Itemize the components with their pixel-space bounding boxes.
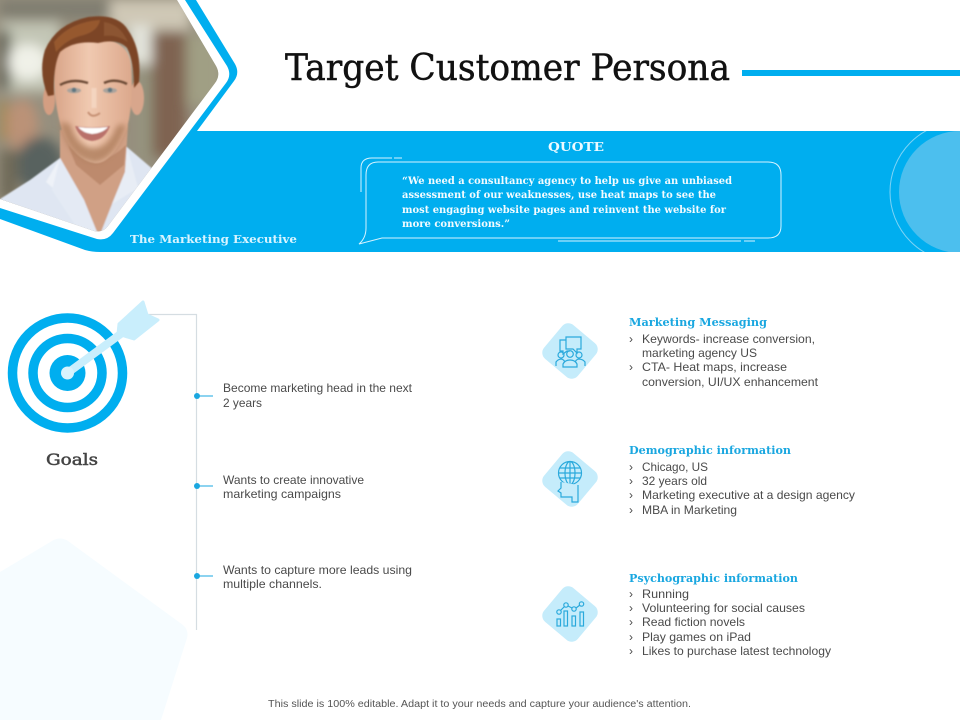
- section: demographic information: Marketing executive at a design agency: [642, 488, 855, 502]
- goal 3: multiple channels.: [223, 577, 322, 591]
- eyes: [67, 88, 81, 93]
- face: [54, 38, 132, 163]
- shirt: [0, 147, 155, 240]
- section: psychographic information: Running: [642, 587, 689, 601]
- section: psychographic information: ›: [629, 601, 633, 615]
- quote text: most engaging website pages and reinvent the website for: [402, 204, 726, 216]
- quote text: assessment of our weaknesses, use heat maps to see the: [402, 189, 716, 201]
- section: psychographic information: ›: [629, 587, 633, 601]
- section: demographic information: Demographic information: [629, 443, 792, 457]
- ears: [43, 85, 55, 115]
- quote text: [402, 175, 733, 230]
- icon: target with arrow: [12, 302, 158, 428]
- quote heading: QUOTE: [548, 140, 604, 154]
- section: psychographic information: Volunteering for social causes: [642, 601, 805, 615]
- stubble: [60, 122, 126, 163]
- blue band: [0, 0, 960, 252]
- title rule: [742, 70, 960, 76]
- section: psychographic information: Play games on iPad: [642, 630, 751, 644]
- header band: [0, 0, 960, 262]
- section: marketing messaging: [629, 315, 819, 389]
- section: marketing messaging: CTA- Heat maps, increase: [642, 360, 787, 374]
- footer note: This slide is 100% editable. Adapt it to your needs and capture your audience's attention.: [268, 699, 691, 710]
- quote bubble: [359, 158, 781, 244]
- decorative circle: [890, 131, 960, 252]
- goals label: Goals: [46, 450, 98, 469]
- goal 2: [194, 473, 364, 501]
- section: demographic information: MBA in Marketing: [642, 503, 737, 517]
- section: demographic information: ›: [629, 503, 633, 517]
- section: psychographic information: ›: [629, 615, 633, 629]
- section: demographic information: [629, 443, 855, 517]
- goal 3: Wants to capture more leads using: [223, 563, 412, 577]
- icon: demographic information: [539, 448, 601, 510]
- white frame around photo: [0, 0, 229, 239]
- hair: [42, 16, 140, 96]
- quote text: “We need a consultancy agency to help us give an unbiased: [402, 175, 733, 187]
- section: marketing messaging: ›: [629, 332, 633, 346]
- section: demographic information: ›: [629, 488, 633, 502]
- goal 2: Wants to create innovative: [223, 473, 364, 487]
- brows: [60, 81, 88, 85]
- section: demographic information: 32 years old: [642, 474, 707, 488]
- icon: marketing messaging: [539, 320, 601, 382]
- section: psychographic information: Psychographic information: [629, 571, 799, 585]
- bubble outline: [359, 162, 781, 244]
- section: demographic information: ›: [629, 460, 633, 474]
- section: psychographic information: ›: [629, 644, 633, 658]
- section: psychographic information: [629, 571, 831, 658]
- section: demographic information: Chicago, US: [642, 460, 708, 474]
- mouth: [75, 126, 110, 141]
- section: marketing messaging: Marketing Messaging: [629, 315, 767, 329]
- section: psychographic information: Read fiction novels: [642, 615, 745, 629]
- title: Target Customer Persona: [285, 48, 730, 89]
- nose: [88, 112, 100, 116]
- photo of marketing executive: [0, 0, 230, 240]
- section: psychographic information: Likes to purchase latest technology: [642, 644, 831, 658]
- icon: psychographic information: [539, 583, 601, 645]
- goal 1: Become marketing head in the next: [223, 381, 413, 395]
- goal 1: [194, 381, 413, 410]
- section: marketing messaging: marketing agency US: [642, 346, 757, 360]
- section: psychographic information: ›: [629, 630, 633, 644]
- goal 3: [194, 563, 412, 591]
- quote text: more conversions.”: [402, 218, 510, 230]
- section: marketing messaging: Keywords- increase conversion,: [642, 332, 815, 346]
- neck: [60, 125, 128, 232]
- section: marketing messaging: ›: [629, 360, 633, 374]
- collar: [46, 162, 59, 186]
- background pale hexagon: [0, 538, 188, 720]
- goals connector line: [148, 314, 196, 630]
- goal 1: 2 years: [223, 396, 262, 410]
- persona name: The Marketing Executive: [130, 232, 297, 246]
- section: marketing messaging: conversion, UI/UX enhancement: [642, 375, 819, 389]
- section: demographic information: ›: [629, 474, 633, 488]
- goal 2: marketing campaigns: [223, 487, 341, 501]
